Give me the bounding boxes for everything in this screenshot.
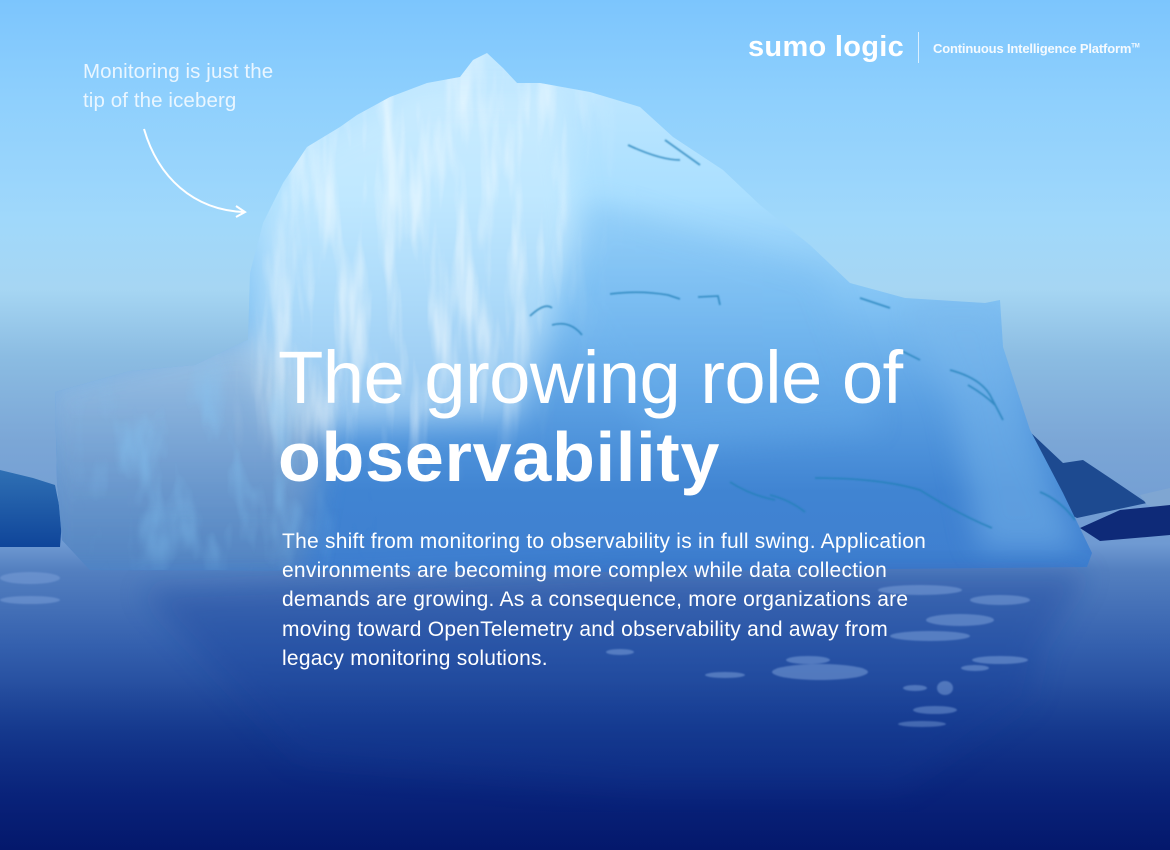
intro paragraph: environments are becoming more complex while data collection [282, 559, 887, 582]
distant land [0, 470, 62, 547]
logo: sumo logic: Continuous Intelligence PlatformTM [933, 41, 1140, 56]
arrow: callout to iceberg [143, 128, 247, 218]
intro paragraph [282, 530, 926, 670]
callout: tip of the iceberg: tip of the iceberg [83, 89, 236, 112]
intro paragraph: legacy monitoring solutions. [282, 647, 548, 670]
title [278, 336, 904, 496]
water reflection [140, 572, 1088, 790]
callout: tip of the iceberg: Monitoring is just the [83, 60, 273, 83]
ice floes [0, 572, 1030, 727]
intro paragraph: The shift from monitoring to observability is in full swing. Application [282, 530, 926, 553]
title: The growing role of [278, 336, 903, 419]
intro paragraph: moving toward OpenTelemetry and observability and away from [282, 618, 888, 641]
logo: sumo logic [748, 31, 1140, 63]
iceberg [55, 53, 1092, 572]
logo: sumo logic: sumo logic [748, 31, 904, 63]
cracks [530, 140, 1075, 528]
title: observability [278, 418, 720, 496]
intro paragraph: demands are growing. As a consequence, more organizations are [282, 588, 908, 611]
callout: tip of the iceberg [83, 60, 273, 112]
